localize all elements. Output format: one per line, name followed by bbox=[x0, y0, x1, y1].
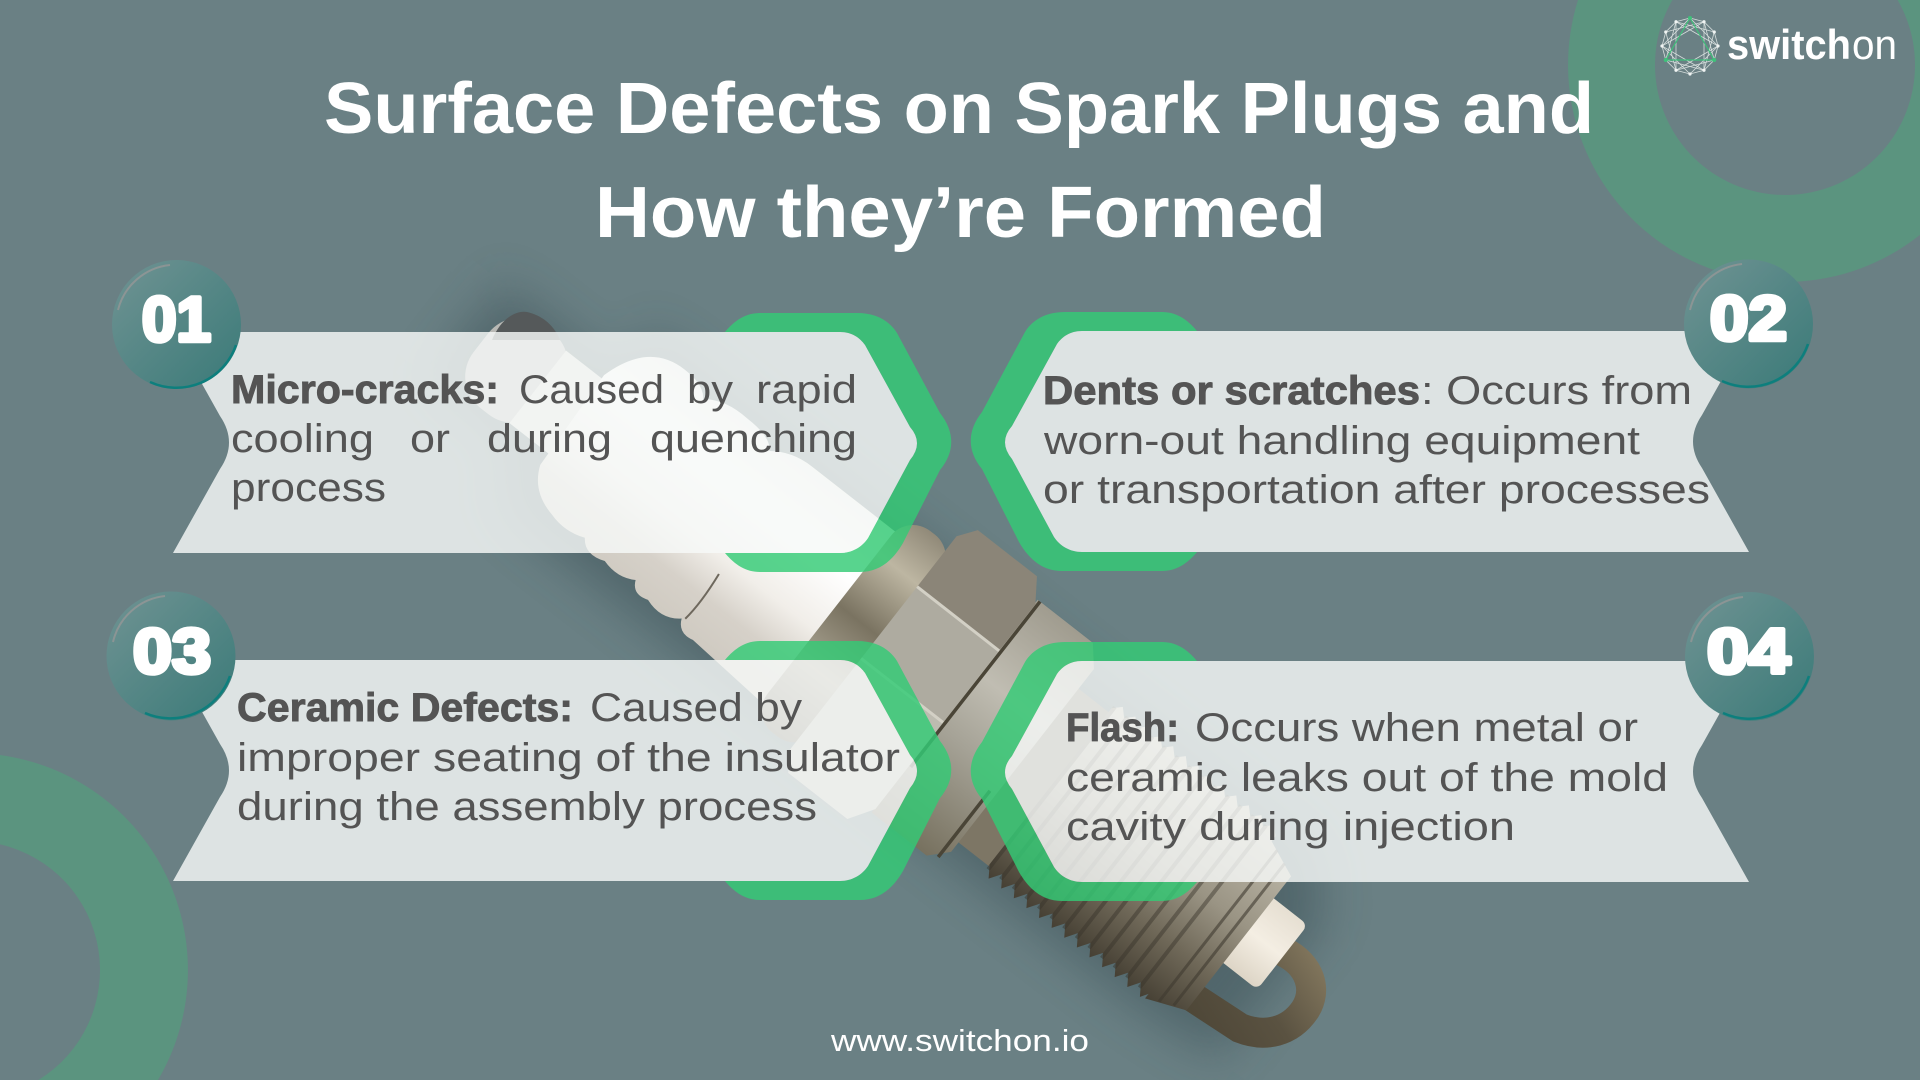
shell end rings bbox=[1159, 850, 1288, 1010]
ribbon card bbox=[1005, 661, 1749, 882]
description text: Micro-cracks: bbox=[231, 368, 499, 412]
ribbon card bbox=[173, 660, 917, 881]
description text bbox=[1066, 706, 1668, 849]
terminal neck bbox=[509, 351, 613, 460]
description text: Flash: bbox=[1066, 706, 1179, 750]
description text: cooling bbox=[231, 417, 374, 461]
decorative ring: bottom left bbox=[0, 755, 188, 1080]
description text: Dents or scratches bbox=[1043, 369, 1420, 413]
description text: during bbox=[487, 417, 612, 461]
number badge 01: 01 bbox=[142, 285, 211, 355]
title: How they’re Formed bbox=[595, 173, 1326, 253]
number badge 02: 02 bbox=[1710, 284, 1787, 354]
logo bbox=[1660, 16, 1897, 76]
hex nut bbox=[778, 522, 1050, 829]
hex nut face: upper bbox=[917, 522, 1050, 651]
description text: during the assembly process bbox=[237, 785, 817, 829]
number badge 04: 04 bbox=[1707, 617, 1790, 687]
description text: or bbox=[410, 417, 450, 461]
panel 01: micro-cracks bbox=[173, 313, 951, 572]
description text: ceramic leaks out of the mold bbox=[1066, 756, 1668, 800]
logo wordmark: on bbox=[1852, 21, 1897, 68]
description text bbox=[1043, 369, 1710, 512]
plug terminal cap bbox=[492, 312, 560, 340]
green hexagon accent bbox=[725, 313, 951, 572]
number badge 02 bbox=[1684, 260, 1813, 388]
description text: worn-out handling equipment bbox=[1043, 419, 1640, 463]
description text: : Occurs from bbox=[1421, 369, 1692, 413]
collar bbox=[871, 600, 1106, 866]
description text: or transportation after processes bbox=[1043, 468, 1710, 512]
shell end bbox=[1145, 838, 1302, 1023]
spark plug photo illustration bbox=[389, 218, 1374, 1080]
title bbox=[324, 69, 1594, 253]
description text bbox=[231, 368, 857, 510]
description text bbox=[237, 686, 900, 829]
description text: process bbox=[231, 466, 386, 510]
collar seams bbox=[878, 602, 1101, 857]
description text: Caused bbox=[519, 368, 664, 412]
ceramic tip bbox=[1218, 894, 1308, 990]
description text: rapid bbox=[756, 368, 857, 412]
green hexagon accent bbox=[971, 312, 1197, 571]
number badge 03 bbox=[106, 592, 236, 720]
panel 04: flash bbox=[971, 642, 1749, 901]
decorative ring: top right bbox=[1568, 0, 1920, 282]
spark plug shadow bbox=[393, 241, 1357, 1066]
panel 03: ceramic defects bbox=[173, 641, 951, 900]
footer website url: www.switchon.io bbox=[830, 1023, 1089, 1058]
hex nut face: front bbox=[861, 587, 999, 722]
green hexagon accent bbox=[725, 641, 951, 900]
description text: cavity during injection bbox=[1066, 805, 1515, 849]
thread body bbox=[982, 702, 1280, 1002]
description text: improper seating of the insulator bbox=[237, 736, 900, 780]
thread grooves bbox=[1050, 787, 1214, 915]
green hexagon accent bbox=[971, 642, 1197, 901]
number badge 04 bbox=[1685, 592, 1814, 721]
panel 02: dents or scratches bbox=[971, 312, 1749, 571]
crimp collar bbox=[751, 514, 957, 754]
hex nut face: lower bbox=[778, 658, 943, 829]
ribbon card bbox=[1005, 331, 1749, 552]
ribbon card bbox=[173, 332, 917, 553]
terminal head bbox=[449, 302, 584, 439]
number badge 01 bbox=[112, 260, 241, 389]
description text: quenching bbox=[650, 417, 857, 461]
title: Surface Defects on Spark Plugs and bbox=[324, 69, 1594, 149]
ceramic insulator with ribs bbox=[504, 331, 906, 712]
logo wordmark: switch bbox=[1727, 21, 1851, 68]
thread neck bbox=[953, 684, 1112, 869]
description text: Occurs when metal or bbox=[1195, 706, 1638, 750]
number badge 03: 03 bbox=[133, 617, 211, 687]
description text: Caused by bbox=[590, 686, 802, 730]
icon: switchon network emblem bbox=[1660, 16, 1720, 76]
description text: Ceramic Defects: bbox=[237, 686, 573, 730]
description text: by bbox=[687, 368, 733, 412]
hex edge highlight bbox=[861, 587, 999, 722]
electrode bbox=[1185, 952, 1311, 1033]
insulator groove bbox=[684, 574, 721, 620]
